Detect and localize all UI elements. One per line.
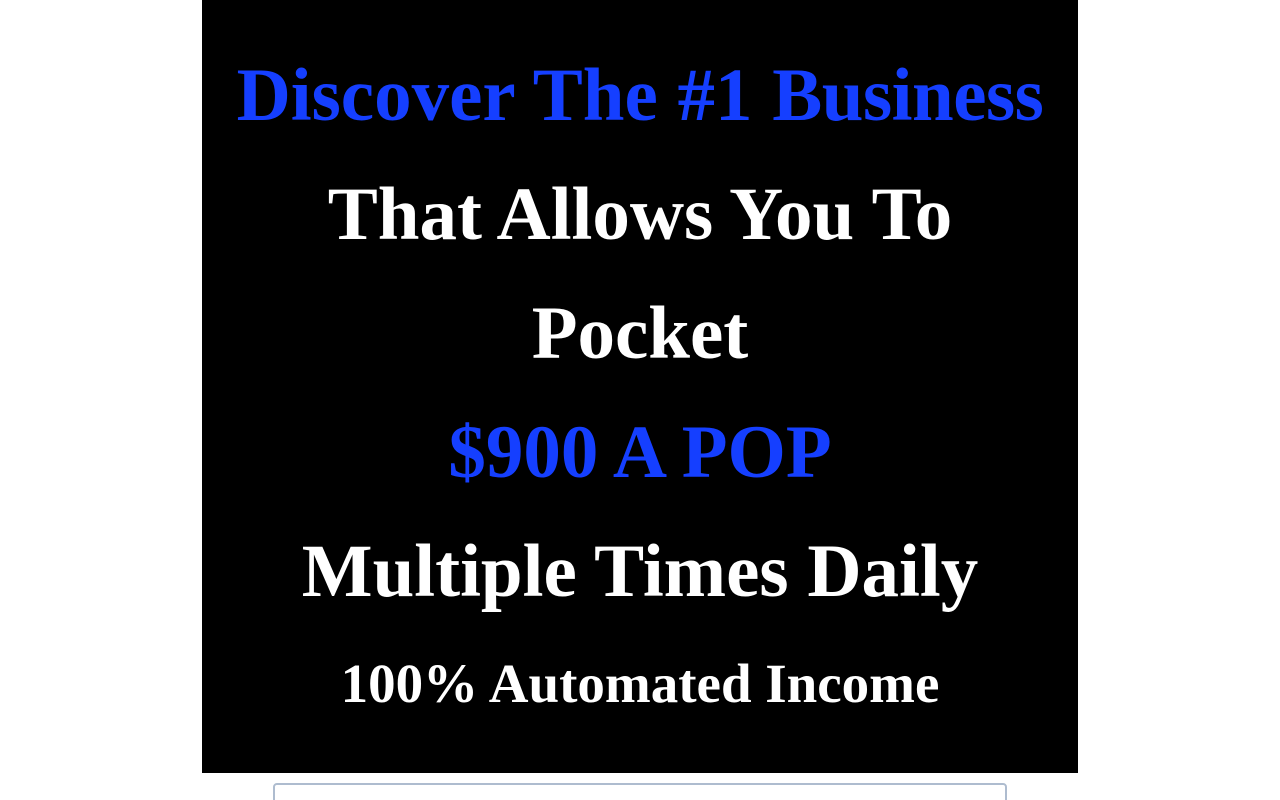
heading line: Multiple Times Daily: Multiple Times Daily xyxy=(302,530,978,613)
heading line: That Allows You To: That Allows You To xyxy=(328,173,952,256)
subheading: 100% Automated Income: 100% Automated Income xyxy=(341,653,939,714)
form box outline, cut off at the bottom edge xyxy=(273,783,1007,800)
heading line: $900 A POP: $900 A POP xyxy=(448,411,832,494)
heading line: Discover The #1 Business: Discover The #1 Business xyxy=(237,54,1043,137)
heading line: Pocket: Pocket xyxy=(532,292,748,375)
panel: black headline banner xyxy=(202,0,1078,773)
